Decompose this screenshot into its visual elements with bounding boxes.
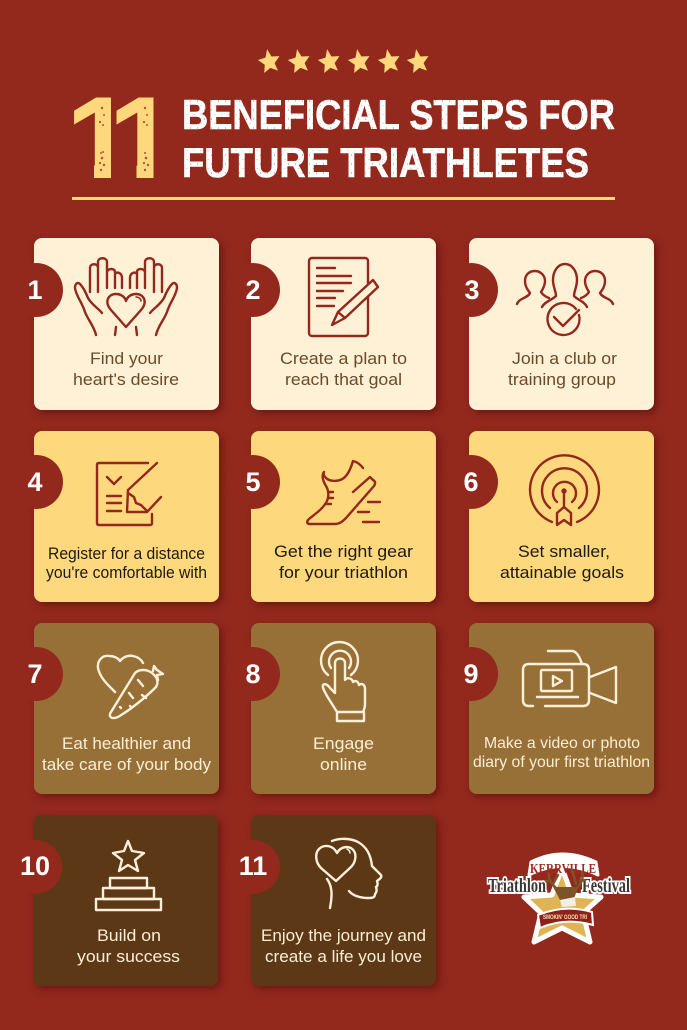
title underline xyxy=(72,197,615,200)
icon: hands holding heart xyxy=(75,258,177,335)
label: Get the right gear xyxy=(274,542,413,561)
number 9: 9 xyxy=(463,659,479,689)
label: Set smaller, xyxy=(518,542,610,561)
icon: checklist with pencil xyxy=(97,463,161,525)
title: FUTURE TRIATHLETES xyxy=(182,139,589,186)
label: Build on xyxy=(97,926,161,945)
panel: step 5 xyxy=(226,431,436,602)
number 1: 1 xyxy=(27,275,43,305)
logo name arc xyxy=(529,854,598,875)
panel: step 7 xyxy=(9,623,219,794)
number 3: 3 xyxy=(464,275,480,305)
label: Make a video or photo xyxy=(484,735,640,752)
title: BENEFICIAL STEPS FOR xyxy=(182,91,615,138)
label: online xyxy=(320,755,367,774)
panel: step 8 xyxy=(226,623,436,794)
label: Find your xyxy=(90,349,163,368)
logo star xyxy=(524,868,601,942)
number 11: 11 xyxy=(239,851,267,881)
label: Join a club or xyxy=(512,349,617,368)
logo: Kerrville Triathlon Festival: KERRVILLE xyxy=(530,862,596,877)
label xyxy=(42,734,211,774)
label xyxy=(73,349,179,389)
panel: step 4 xyxy=(9,431,219,602)
label: take care of your body xyxy=(42,755,211,774)
row of six stars xyxy=(256,47,431,74)
label xyxy=(261,926,426,966)
logo deer xyxy=(546,870,585,907)
icon: finger touch xyxy=(321,642,365,721)
panel: step 11 xyxy=(226,815,436,986)
big number 11 xyxy=(74,98,154,178)
number 10: 10 xyxy=(20,851,50,881)
icon: heart and carrot xyxy=(98,656,163,718)
logo wordmarks: Festival xyxy=(582,875,630,897)
title xyxy=(182,91,615,186)
icon: document and pen xyxy=(309,258,378,336)
big number 11: 1 xyxy=(66,73,136,203)
panel: step 1 xyxy=(9,238,219,410)
icon: running shoe xyxy=(307,461,380,524)
number 5: 5 xyxy=(245,467,261,497)
logo banner: SMOKIN' GOOD TRI xyxy=(543,915,587,921)
label xyxy=(473,735,650,771)
logo banner xyxy=(538,909,593,928)
panel: step 9 xyxy=(444,623,654,794)
label: Enjoy the journey and xyxy=(261,926,426,945)
number 7: 7 xyxy=(27,659,43,689)
icon: head with heart xyxy=(316,839,381,908)
logo: Kerrville Triathlon Festival xyxy=(488,854,630,942)
logo wordmarks: Triathlon xyxy=(488,875,546,897)
number 2: 2 xyxy=(245,275,261,305)
panel: step 6 xyxy=(444,431,654,602)
icon: target and arrow xyxy=(530,455,599,525)
label xyxy=(508,349,617,389)
panel: step 2 xyxy=(226,238,436,410)
number 6: 6 xyxy=(463,467,479,497)
label: heart's desire xyxy=(73,370,179,389)
label xyxy=(500,542,624,582)
label: Eat healthier and xyxy=(62,734,191,753)
panel: step 3 xyxy=(444,238,654,410)
label xyxy=(46,544,207,582)
icon: star on podium xyxy=(96,841,161,910)
label: you're comfortable with xyxy=(46,563,207,582)
big number 11: 1 xyxy=(108,73,178,203)
label: your success xyxy=(77,947,180,966)
number 8: 8 xyxy=(245,659,261,689)
label: training group xyxy=(508,370,616,389)
logo wordmarks xyxy=(488,875,630,897)
label: Create a plan to xyxy=(280,349,407,368)
label xyxy=(313,734,374,774)
label: Register for a distance xyxy=(48,544,205,563)
label: create a life you love xyxy=(265,947,422,966)
icon: video camera xyxy=(523,651,616,706)
icon: group with check xyxy=(517,264,613,335)
label: Engage xyxy=(313,734,374,753)
label xyxy=(77,926,180,966)
label xyxy=(280,349,407,389)
number 4: 4 xyxy=(27,467,43,497)
label: attainable goals xyxy=(500,563,624,582)
label: reach that goal xyxy=(285,370,402,389)
label: diary of your first triathlon xyxy=(473,754,650,771)
label: for your triathlon xyxy=(279,563,408,582)
label xyxy=(274,542,413,582)
panel: step 10 xyxy=(8,815,218,986)
